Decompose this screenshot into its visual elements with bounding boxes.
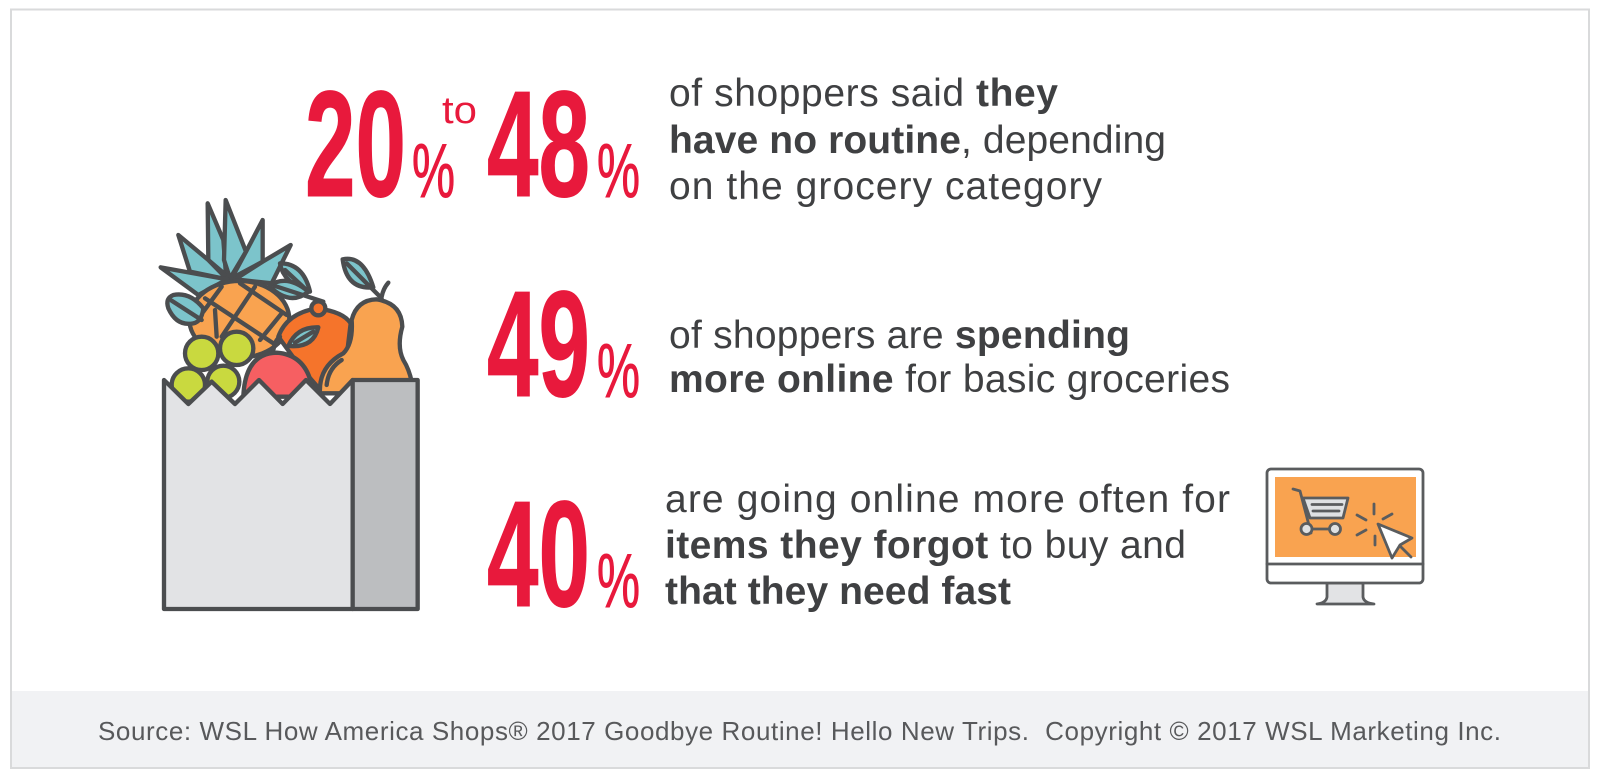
pineapple leaves — [161, 200, 291, 295]
text: more online for basic groceries — [669, 358, 1230, 401]
stat 1 text: of shoppers said they — [669, 72, 1058, 115]
stat 1: 20% to 48% — [305, 59, 640, 228]
stat 1: 20% to 48%: % — [412, 129, 455, 214]
icon: click sparks and cursor — [1357, 504, 1412, 558]
bag side — [353, 380, 418, 609]
orange — [278, 301, 351, 393]
text: items they forgot to buy and — [665, 524, 1186, 567]
stat 1: 20% to 48%: to — [442, 90, 477, 132]
stat 1: 20% to 48%: 20 — [305, 59, 406, 228]
text: have no routine, depending — [669, 119, 1166, 162]
monitor body — [1267, 469, 1423, 583]
stat 2: 49%: 49 — [487, 259, 590, 428]
icon: computer monitor with shopping cart — [1267, 469, 1423, 604]
screen — [1275, 477, 1416, 557]
stat 3: 40%: 40 — [487, 469, 590, 638]
monitor stand — [1317, 583, 1374, 604]
pear — [320, 299, 413, 393]
stat 3: 40%: % — [597, 539, 640, 624]
stat 2 text: of shoppers are spending — [669, 314, 1130, 357]
icon: cart — [1293, 489, 1348, 534]
leaves — [167, 259, 388, 324]
text: that they need fast — [665, 570, 1011, 613]
stat 1: 20% to 48%: % — [597, 129, 640, 214]
apple — [243, 353, 313, 397]
grapes — [172, 310, 253, 402]
pineapple body — [189, 281, 289, 358]
footer band — [12, 691, 1588, 767]
icon: grocery bag with fruit — [161, 200, 418, 609]
stat 3 text: are going online more often for — [665, 478, 1230, 521]
text: on the grocery category — [669, 165, 1102, 208]
stat 1: 20% to 48%: 48 — [487, 59, 590, 228]
source text: Source: WSL How America Shops® 2017 Goodbye Routine! Hello New Trips. Copyright © 2017 WSL Marketing Inc. — [98, 716, 1501, 746]
bag front — [164, 380, 353, 609]
stat 2: 49%: % — [597, 329, 640, 414]
